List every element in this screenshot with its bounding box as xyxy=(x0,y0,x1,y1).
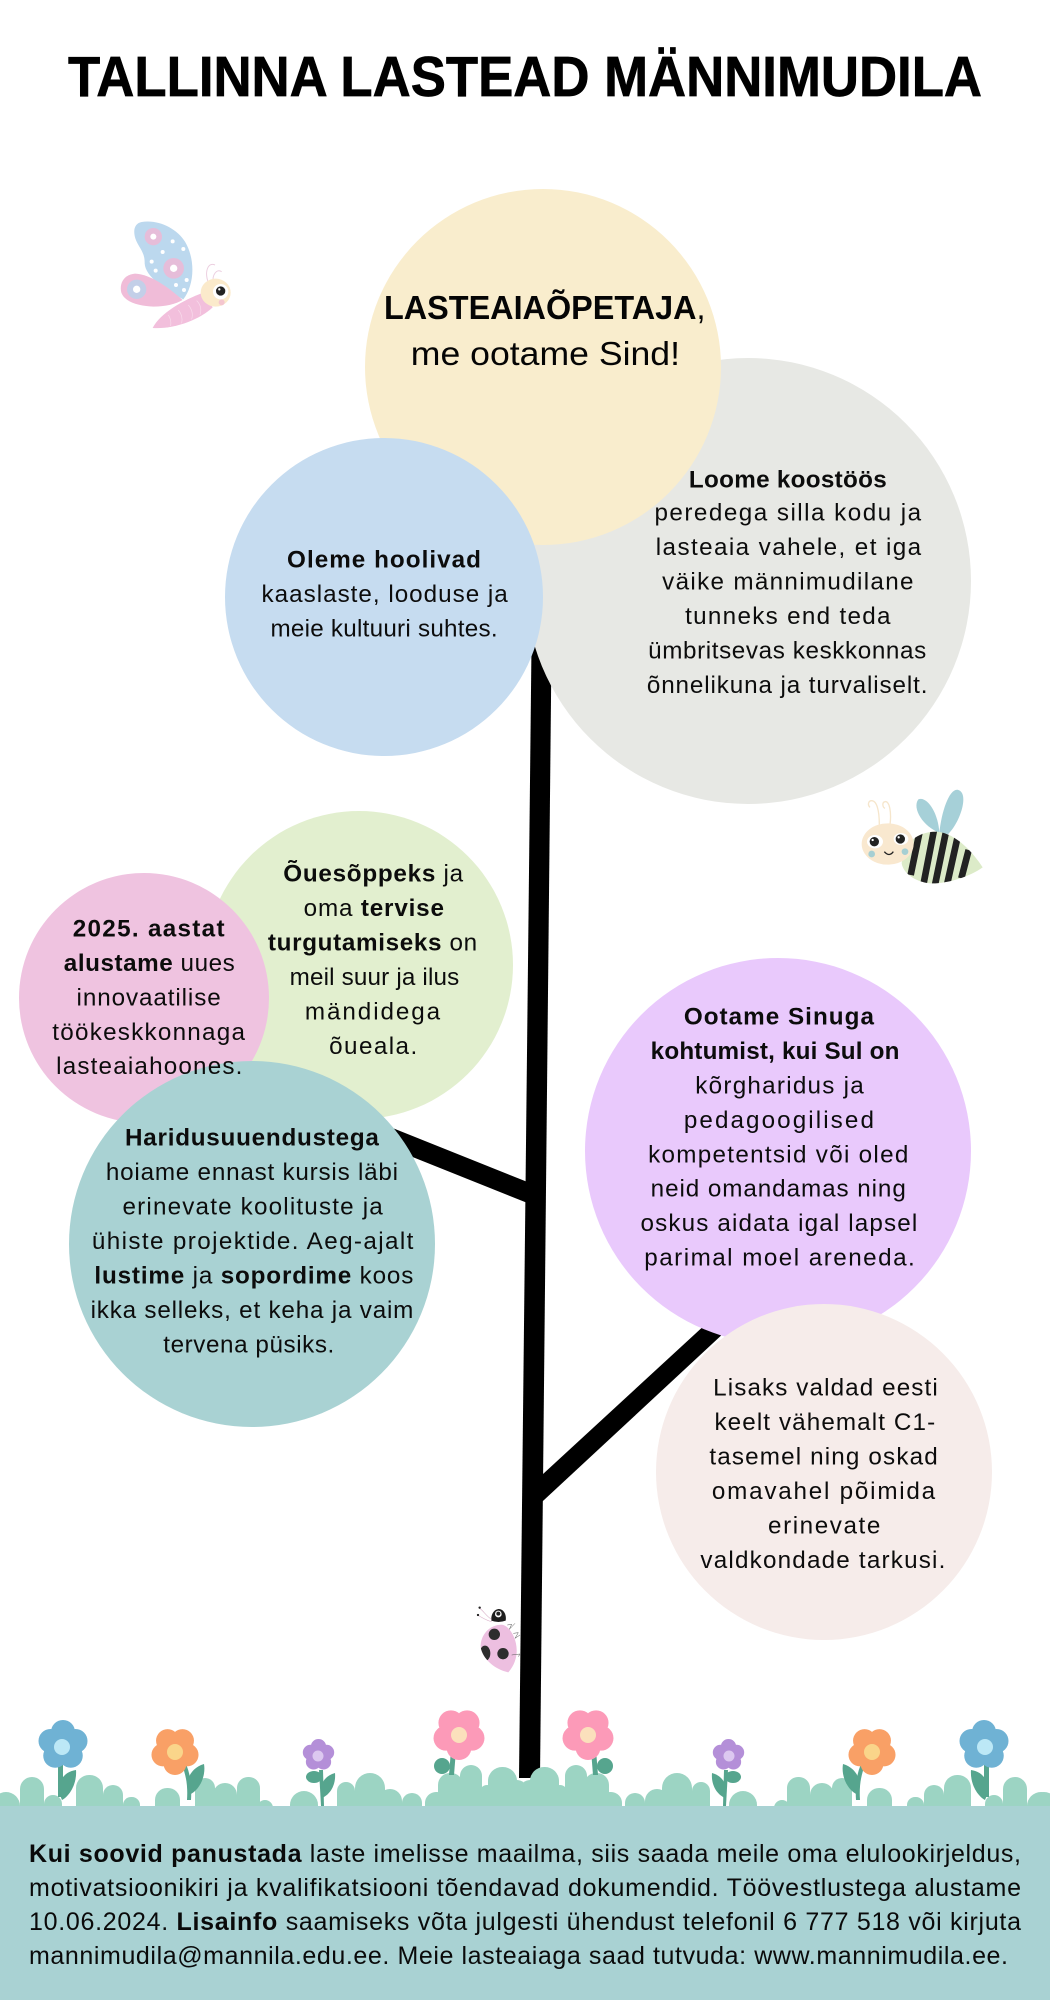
text: cooperation: peredega silla kodu ja xyxy=(654,500,922,527)
text: caring: kaaslaste, looduse ja xyxy=(262,581,508,608)
text: new building: alustame uues xyxy=(64,950,235,977)
text: cooperation: Loome koostöös xyxy=(689,466,887,493)
text: requirements: neid omandamas ning xyxy=(651,1176,906,1203)
panel: innovation circle xyxy=(69,1061,435,1427)
text: cooperation: väike männimudilane xyxy=(662,568,913,595)
text: new building xyxy=(52,915,245,1080)
text: innovation xyxy=(91,1125,414,1358)
footer text: mannimudila@mannila.edu.ee. Meie lasteaiaga saad tutvuda: www.mannimudila.ee. xyxy=(29,1942,1008,1970)
text: innovation: hoiame ennast kursis läbi xyxy=(106,1159,398,1186)
text: language: tasemel ning oskad xyxy=(709,1444,938,1471)
footer text xyxy=(29,1840,1021,1970)
text: new building: lasteaiahoones. xyxy=(56,1053,242,1080)
tree trunk and branches xyxy=(380,600,740,1778)
text: innovation: tervena püsiks. xyxy=(163,1331,334,1358)
text: outdoor learning: Õuesõppeks ja xyxy=(283,860,464,888)
heading text: LASTEAIAÕPETAJA, xyxy=(384,289,706,327)
text: cooperation: õnnelikuna ja turvaliselt. xyxy=(647,672,928,699)
panel: caring circle xyxy=(225,438,543,756)
text: cooperation: lasteaia vahele, et iga xyxy=(656,534,922,561)
text: language: erinevate xyxy=(768,1513,880,1540)
text: requirements: pedagoogilised xyxy=(684,1107,874,1134)
panel: new building circle xyxy=(19,873,269,1123)
text: outdoor learning: õueala. xyxy=(329,1033,417,1060)
text: innovation: ikka selleks, et keha ja vaim xyxy=(91,1297,413,1324)
panel: footer application info xyxy=(0,1806,1050,2000)
text: language xyxy=(700,1375,945,1574)
text: caring: meie kultuuri suhtes. xyxy=(270,616,498,643)
garden: grass and flowers, left xyxy=(0,1710,527,1833)
text: caring xyxy=(262,547,508,643)
text: language: omavahel põimida xyxy=(712,1478,936,1505)
text: outdoor learning: oma tervise xyxy=(304,895,444,922)
text: cooperation: tunneks end teda xyxy=(685,603,891,630)
footer text: Kui soovid panustada laste imelisse maailma, siis saada meile oma elulookirjeldus, xyxy=(29,1840,1021,1868)
heading text: me ootame Sind! xyxy=(411,336,680,373)
text: requirements: kõrgharidus ja xyxy=(695,1072,864,1099)
text: innovation: ühiste projektide. Aeg-ajalt xyxy=(92,1228,414,1255)
text: outdoor learning xyxy=(268,860,477,1060)
panel: requirements circle xyxy=(585,958,971,1344)
heading text xyxy=(384,289,706,373)
panel: language circle xyxy=(656,1304,992,1640)
text: language: keelt vähemalt C1- xyxy=(714,1409,935,1436)
text: caring: Oleme hoolivad xyxy=(287,547,481,574)
text: outdoor learning: meil suur ja ilus xyxy=(290,964,459,991)
text: requirements: oskus aidata igal lapsel xyxy=(640,1210,917,1237)
garden: grass and flowers, right xyxy=(520,1710,1050,1833)
text: requirements: Ootame Sinuga xyxy=(684,1003,874,1030)
text: cooperation xyxy=(647,466,928,699)
text: new building: töökeskkonnaga xyxy=(52,1019,245,1046)
panel: cooperation circle xyxy=(525,358,971,804)
text: new building: 2025. aastat xyxy=(73,915,225,942)
footer text: motivatsioonikiri ja kvalifikatsiooni tõendavad dokumendid. Töövestlustega alustame xyxy=(29,1874,1021,1902)
title: TALLINNA LASTEAD MÄNNIMUDILA xyxy=(68,45,982,109)
panel: outdoor learning circle xyxy=(205,811,513,1119)
text: language: valdkondade tarkusi. xyxy=(700,1547,945,1574)
text: requirements: kohtumist, kui Sul on xyxy=(651,1038,899,1065)
text: innovation: erinevate koolituste ja xyxy=(122,1194,383,1221)
text: innovation: Haridusuuendustega xyxy=(125,1125,379,1152)
icon: butterfly xyxy=(121,222,231,328)
text: cooperation: ümbritsevas keskkonnas xyxy=(648,637,926,664)
text: outdoor learning: turgutamiseks on xyxy=(268,929,477,956)
icon: ladybug xyxy=(477,1606,520,1672)
text: outdoor learning: mändidega xyxy=(305,998,441,1025)
text: requirements: kompetentsid või oled xyxy=(648,1141,908,1168)
text: language: Lisaks valdad eesti xyxy=(713,1375,938,1402)
text: innovation: lustime ja sopordime koos xyxy=(94,1262,413,1289)
footer text: 10.06.2024. Lisainfo saamiseks võta julgesti ühendust telefonil 6 777 518 või kirjuta xyxy=(29,1908,1021,1936)
text: requirements: parimal moel areneda. xyxy=(644,1245,915,1272)
panel: heading circle xyxy=(365,189,721,545)
icon: bee xyxy=(862,790,983,885)
text: new building: innovaatilise xyxy=(77,984,221,1011)
text: requirements xyxy=(640,1003,917,1272)
